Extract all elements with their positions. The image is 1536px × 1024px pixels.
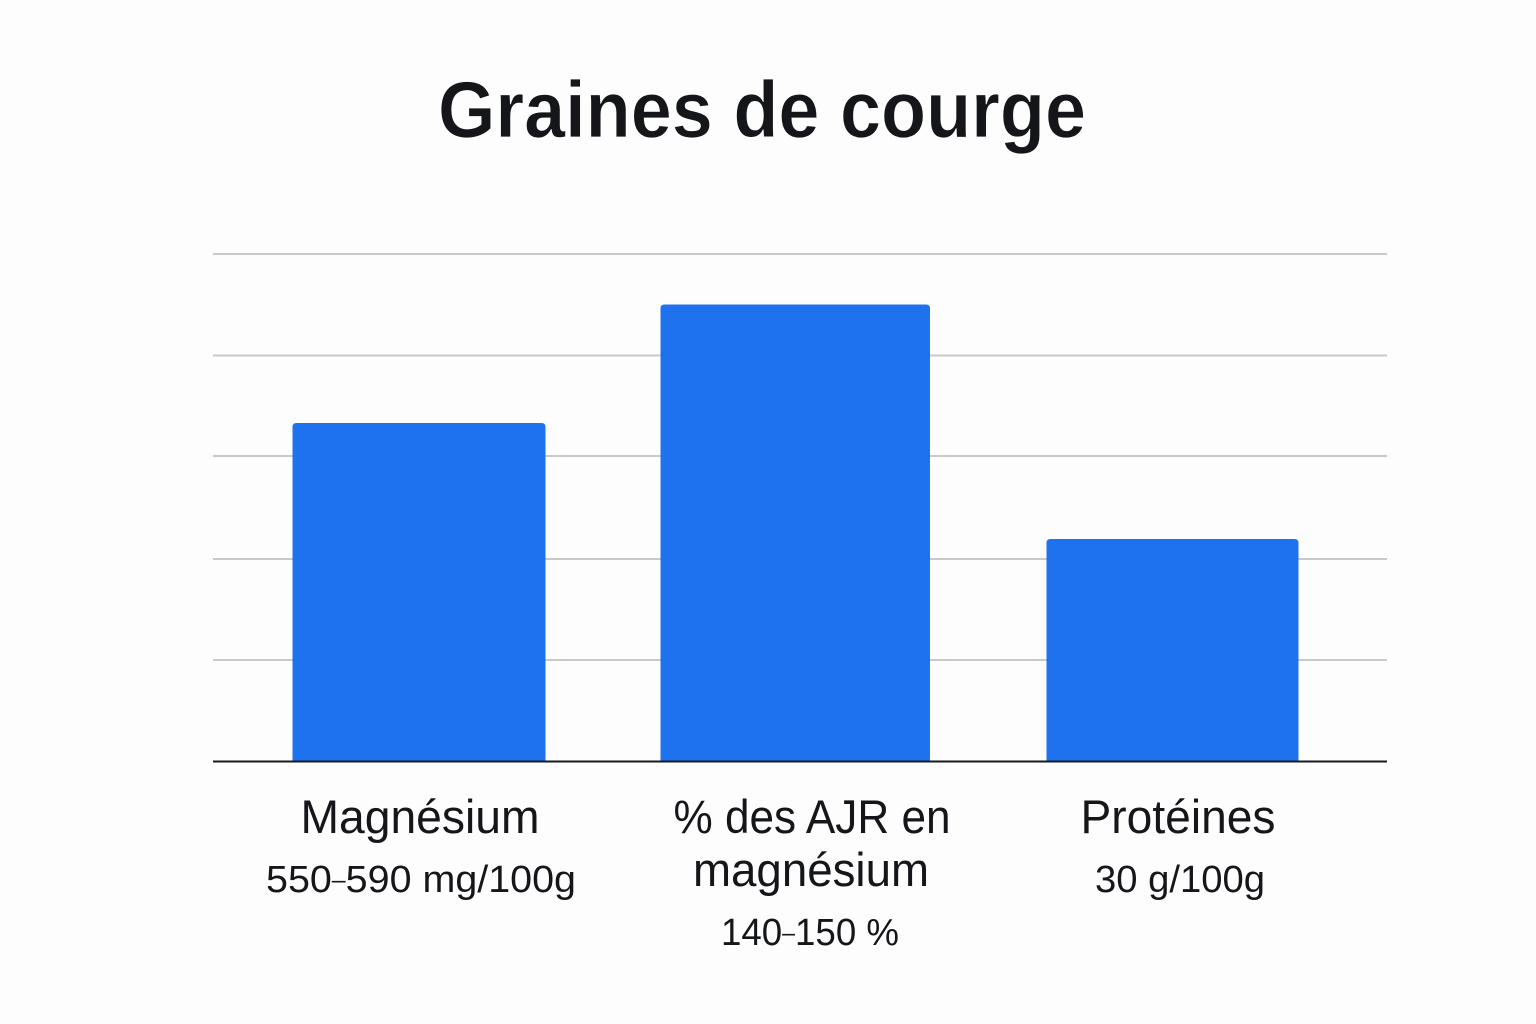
label: Protéines — [1080, 790, 1276, 901]
label: % des AJR en magnésium: 150 % — [795, 912, 899, 954]
bar: Protéines — [1046, 539, 1298, 762]
label: Magnésium: – — [332, 867, 346, 894]
label: Protéines: 30 g/100g — [1095, 859, 1265, 901]
label: % des AJR en magnésium — [674, 790, 950, 954]
label: Magnésium: 550 — [266, 859, 329, 901]
label: % des AJR en magnésium: % des AJR en — [674, 790, 950, 843]
label: % des AJR en magnésium: – — [782, 920, 796, 947]
label: Magnésium: Magnésium — [300, 790, 540, 843]
label: % des AJR en magnésium: magnésium — [693, 843, 929, 896]
label: Protéines: Protéines — [1080, 790, 1276, 843]
bar chart — [213, 254, 1387, 762]
title: Graines de courge — [438, 65, 1086, 154]
label: Magnésium: 590 mg/100g — [346, 859, 576, 901]
label: % des AJR en magnésium: 140 — [721, 912, 784, 954]
bar: Magnésium — [292, 423, 546, 762]
label: Magnésium — [266, 790, 576, 901]
bar: % des AJR en magnésium — [660, 304, 930, 762]
